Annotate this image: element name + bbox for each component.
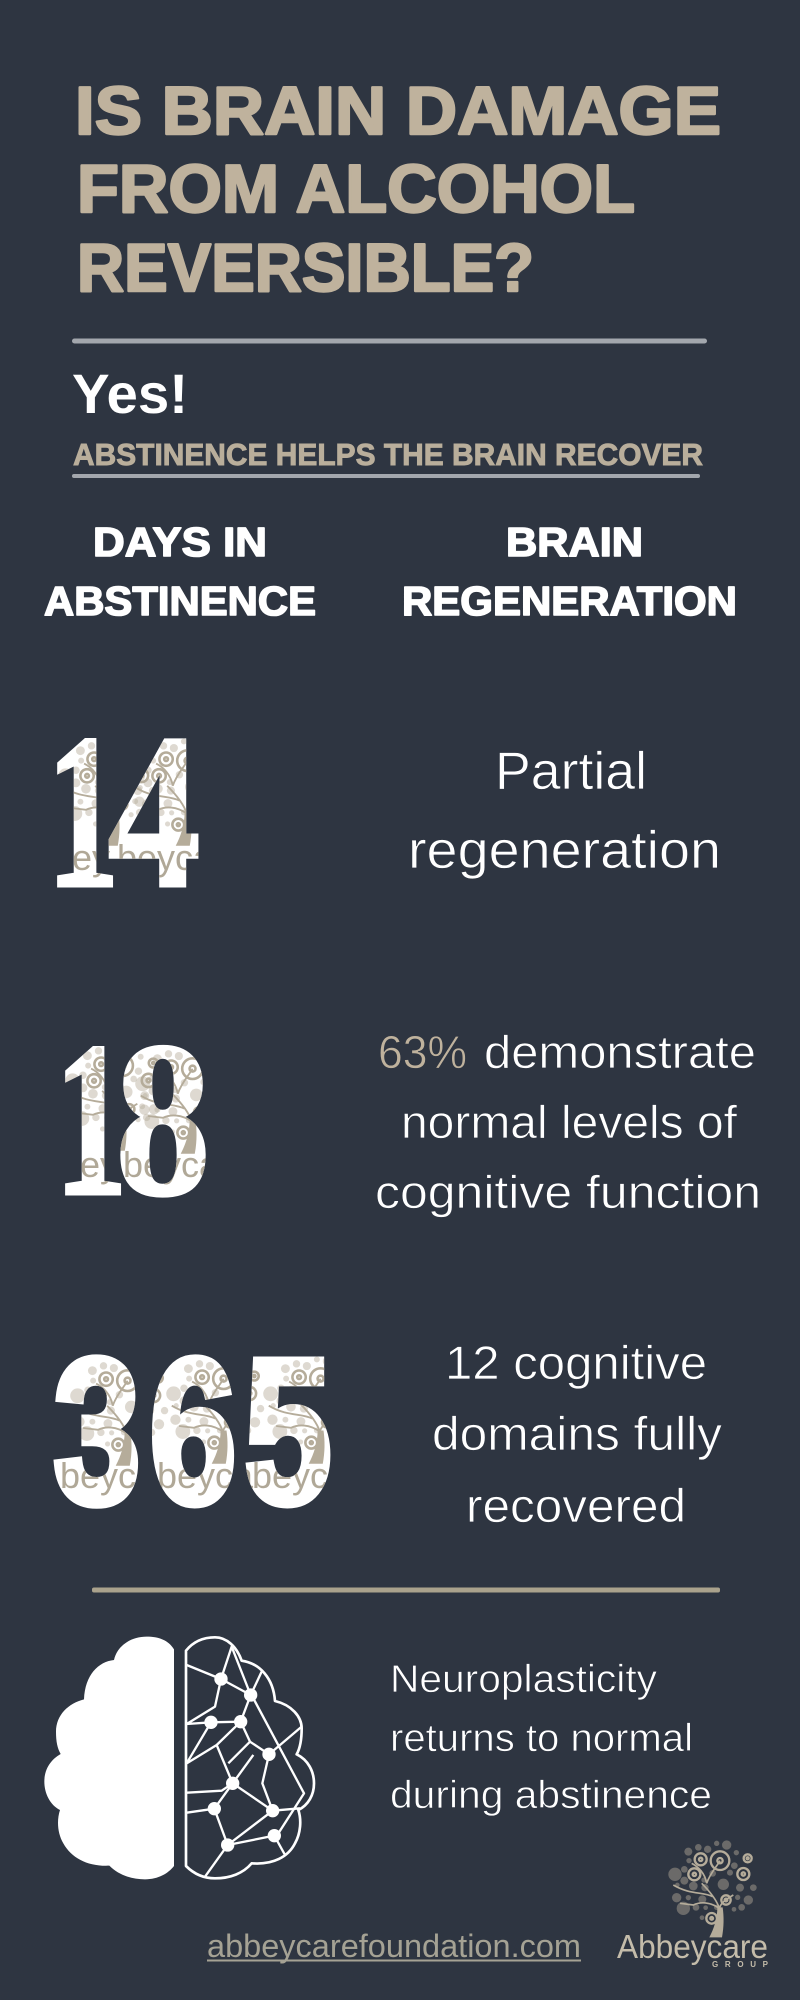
number: 365 days: beyca: [157, 1455, 254, 1496]
subheading: ABSTINENCE HELPS THE BRAIN RECOVER: [73, 437, 703, 472]
text: 63% cognitive function: 63%: [378, 1026, 467, 1078]
text: 63% cognitive function: demonstrate: [484, 1026, 756, 1078]
title: REVERSIBLE?: [77, 230, 534, 306]
text: partial regeneration: Partial: [495, 742, 647, 801]
text: neuroplasticity: [390, 1658, 712, 1817]
title: IS BRAIN DAMAGE: [75, 73, 721, 149]
text: 63% cognitive function: normal levels of: [401, 1096, 737, 1148]
title: [75, 73, 721, 306]
number: 18 days: 8: [115, 997, 211, 1242]
number: 18 days: 1: [54, 996, 128, 1242]
number: 365 days: 5: [245, 1316, 331, 1546]
number: 365 days: 6: [150, 1316, 236, 1546]
number: 14 days: [57, 738, 198, 888]
text: neuroplasticity: returns to normal: [390, 1717, 693, 1760]
number: 14 days: 1: [46, 688, 120, 934]
column heading: brain regeneration: BRAIN: [506, 519, 643, 565]
text: partial regeneration: regeneration: [408, 821, 721, 880]
column heading: days in abstinence: [44, 519, 316, 624]
text: 63% cognitive function: [375, 1026, 761, 1218]
number: 365 days: beyca: [252, 1455, 349, 1496]
text: 12 cognitive domains: domains fully: [432, 1407, 723, 1460]
text: 12 cognitive domains: recovered: [466, 1479, 686, 1532]
text: 12 cognitive domains: [432, 1336, 723, 1532]
number: 18 days: [65, 1044, 206, 1198]
text: neuroplasticity: Neuroplasticity: [390, 1658, 658, 1701]
logo: Abbeycare Group: GROUP: [712, 1960, 769, 1969]
text: 63% cognitive function: cognitive function: [375, 1166, 761, 1218]
icon: brain: [44, 1637, 314, 1879]
number: 365 days: [53, 1354, 330, 1509]
left hemisphere: [44, 1637, 174, 1879]
number: 365 days: 3: [54, 1316, 140, 1546]
number: 18 days: beyca: [123, 1144, 220, 1185]
text: 12 cognitive domains: 12 cognitive: [445, 1336, 707, 1389]
text: partial regeneration: [408, 742, 721, 880]
number: 14 days: 4: [107, 689, 201, 935]
column heading: brain regeneration: REGENERATION: [402, 578, 737, 624]
column heading: brain regeneration: [402, 519, 737, 624]
icon: logo tree: [668, 1840, 757, 1937]
number: 14 days: beyca: [117, 837, 214, 878]
website link: abbeycarefoundation.com: [207, 1928, 581, 1964]
text: neuroplasticity: during abstinence: [390, 1774, 712, 1817]
answer: Yes!: Yes!: [72, 362, 188, 425]
title: FROM ALCOHOL: [77, 151, 635, 227]
right hemisphere network: [186, 1637, 314, 1878]
column heading: days in abstinence: ABSTINENCE: [44, 578, 316, 624]
column heading: days in abstinence: DAYS IN: [93, 519, 267, 565]
logo: Abbeycare Group: [617, 1840, 769, 1969]
logo: Abbeycare Group: Abbeycare: [617, 1928, 768, 1965]
number: 18 days: ey: [80, 1144, 118, 1185]
number: 365 days: beyca: [60, 1455, 157, 1496]
number: 14 days: ey: [72, 837, 110, 878]
